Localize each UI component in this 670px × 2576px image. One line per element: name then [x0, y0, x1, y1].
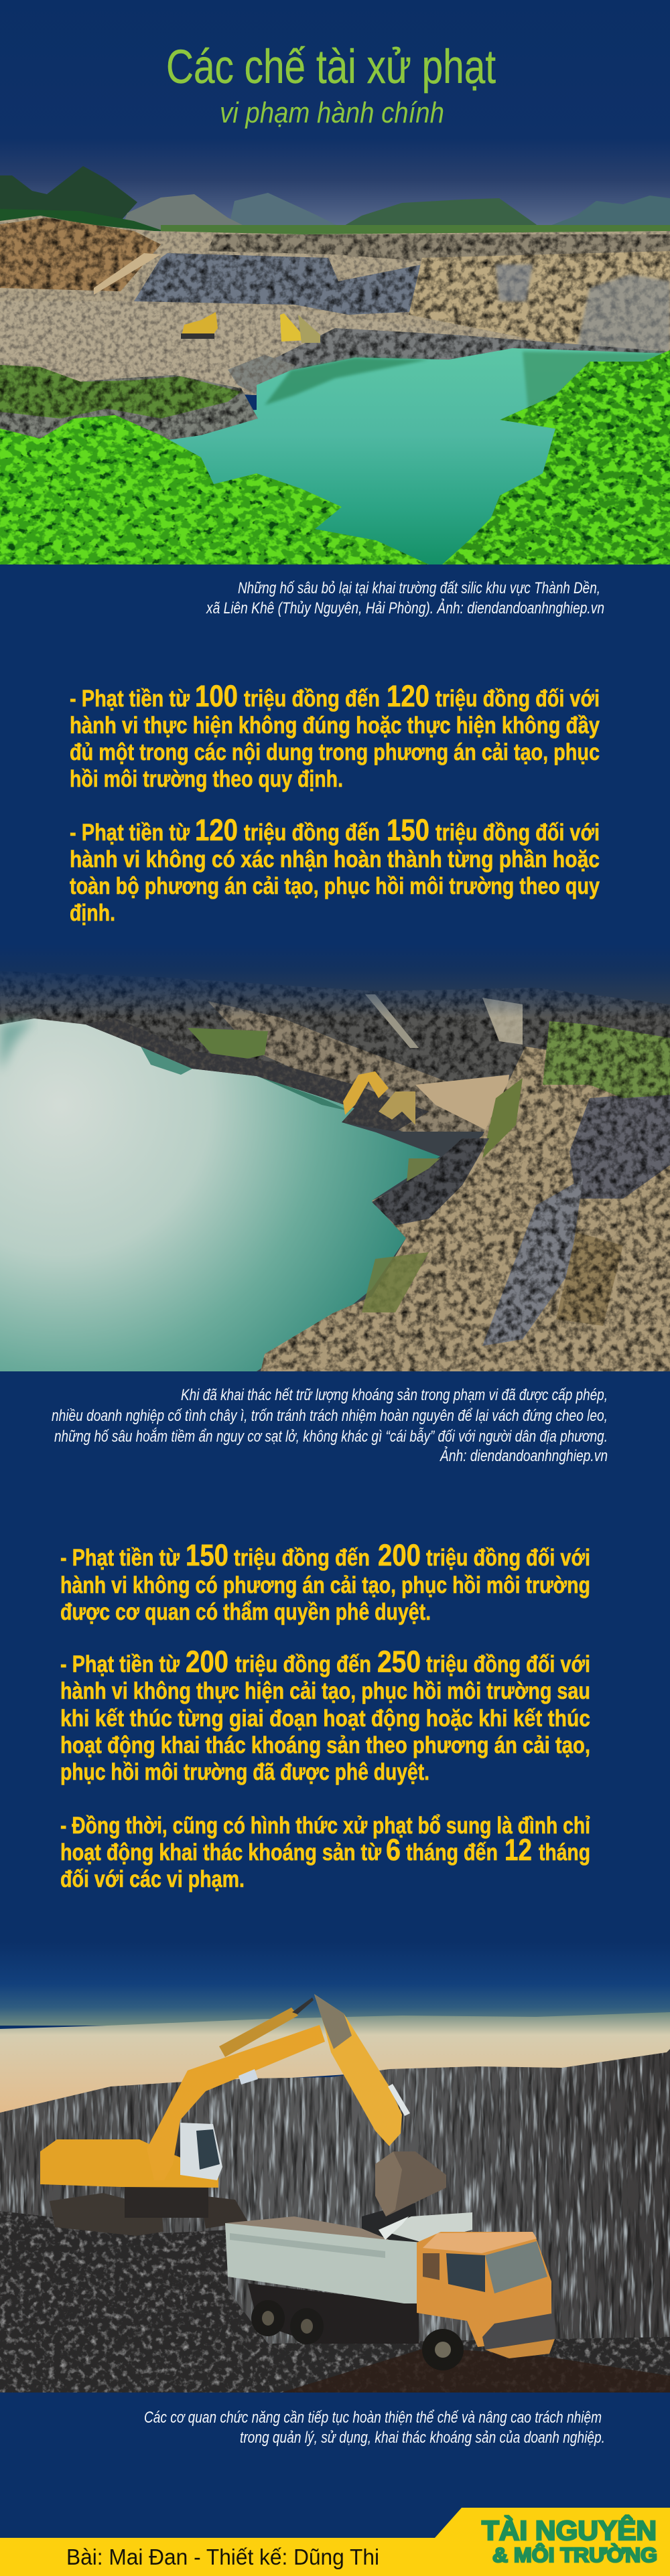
credits: Bài: Mai Đan - Thiết kế: Dũng Thi — [66, 2545, 379, 2569]
logo: Tài Nguyên và Môi Trường: & MÔI TRƯỜNG — [492, 2543, 657, 2567]
subtitle: vi phạm hành chính — [220, 96, 444, 129]
text block: fines 100 to 150 million: định. — [70, 900, 115, 926]
text block: fines 100 to 150 million — [70, 679, 600, 926]
text block: fines 100 to 150 million: triệu đồng đối với — [436, 820, 600, 846]
text block: fines 150 to 250 million and suspension: phục hồi môi trường đã được phê duyệt. — [60, 1759, 429, 1785]
text block: fines 100 to 150 million: hồi môi trường theo quy định. — [70, 766, 343, 792]
text block: fines 100 to 150 million: 100 — [195, 679, 238, 713]
text block: fines 150 to 250 million and suspension: hoạt động khai thác khoáng sản từ — [60, 1839, 382, 1866]
text block: fines 100 to 150 million: 120 — [387, 679, 429, 713]
text block: fines 100 to 150 million: - Phạt tiền từ — [70, 820, 190, 846]
footer: yellow credit band — [0, 2508, 670, 2576]
photo: excavator loading dump truck — [0, 1942, 670, 2393]
text block: fines 150 to 250 million and suspension: khi kết thúc từng giai đoạn hoạt động hoặc khi kết thúc — [60, 1706, 590, 1732]
caption: photo 2 — [52, 1386, 608, 1465]
caption: photo 3 — [144, 2409, 605, 2447]
photo: quarry lake with sky header — [0, 145, 670, 564]
text block: fines 100 to 150 million: triệu đồng đối với — [436, 686, 600, 712]
text block: fines 150 to 250 million and suspension: 150 — [186, 1538, 228, 1572]
text block: fines 100 to 150 million: triệu đồng đến — [244, 686, 380, 712]
logo: Tài Nguyên và Môi Trường: TÀI NGUYÊN — [482, 2515, 657, 2546]
lake — [154, 348, 670, 564]
text block: fines 150 to 250 million and suspension: 6 — [386, 1833, 401, 1867]
title: Các chế tài xử phạt — [166, 41, 496, 94]
photo: abandoned quarry cliff and lake — [0, 944, 670, 1371]
text block: fines 150 to 250 million and suspension: 200 — [378, 1538, 421, 1572]
text block: fines 150 to 250 million and suspension: 200 — [186, 1645, 228, 1679]
foliage right — [442, 350, 670, 564]
text block: fines 100 to 150 million: triệu đồng đến — [244, 820, 380, 846]
text block: fines 150 to 250 million and suspension: được cơ quan có thẩm quyền phê duyệt. — [60, 1599, 431, 1625]
logo: Tài Nguyên và Môi Trường — [482, 2515, 657, 2567]
text block: fines 100 to 150 million: 150 — [387, 813, 429, 847]
text block: fines 100 to 150 million: hành vi không có xác nhận hoàn thành từng phần hoặc — [70, 846, 600, 873]
text block: fines 150 to 250 million and suspension: 12 — [505, 1833, 532, 1867]
foliage left — [0, 415, 429, 564]
text block: fines 150 to 250 million and suspension: tháng đến — [406, 1839, 498, 1866]
dump truck — [225, 2212, 555, 2370]
text block: fines 150 to 250 million and suspension: - Phạt tiền từ — [60, 1545, 180, 1571]
text block: fines 150 to 250 million and suspension: triệu đồng đối với — [426, 1651, 590, 1677]
icon: small excavators — [181, 312, 320, 343]
text block: fines 100 to 150 million: - Phạt tiền từ — [70, 686, 190, 712]
caption: photo 1 — [206, 579, 604, 617]
text block: fines 150 to 250 million and suspension: 250 — [377, 1645, 421, 1679]
title — [166, 41, 496, 129]
text block: fines 150 to 250 million and suspension: triệu đồng đến — [234, 1545, 370, 1571]
text block: fines 150 to 250 million and suspension — [60, 1538, 590, 1892]
lake — [0, 1018, 440, 1371]
text block: fines 150 to 250 million and suspension: triệu đồng đối với — [426, 1545, 590, 1571]
text block: fines 150 to 250 million and suspension: - Phạt tiền từ — [60, 1651, 180, 1677]
text block: fines 100 to 150 million: 120 — [195, 813, 238, 847]
icon: excavators — [343, 1071, 415, 1125]
text block: fines 150 to 250 million and suspension: triệu đồng đến — [235, 1651, 371, 1677]
text block: fines 150 to 250 million and suspension: đối với các vi phạm. — [60, 1866, 245, 1892]
rocky cliff — [261, 1047, 670, 1371]
text block: fines 150 to 250 million and suspension: tháng — [539, 1839, 590, 1866]
excavator — [40, 1994, 446, 2245]
caption: photo 2: Ảnh: diendandoanhnghiep.vn — [439, 1446, 608, 1465]
